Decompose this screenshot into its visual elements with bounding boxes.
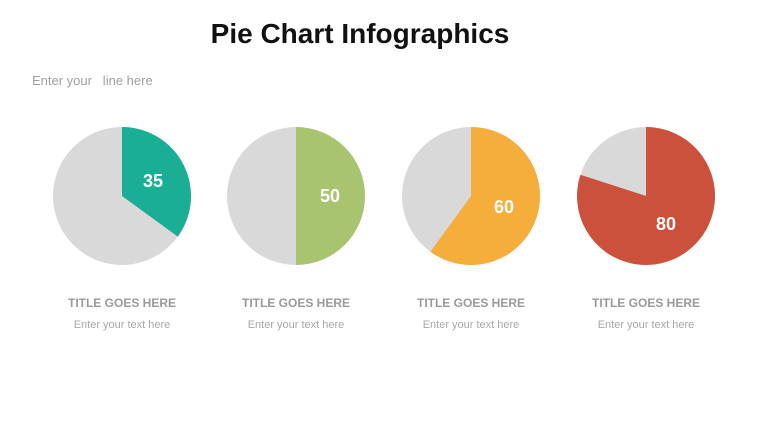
pie: 50: 50 <box>320 186 340 206</box>
label 2: Enter your text here <box>248 319 344 331</box>
label 2: TITLE GOES HERE <box>242 296 350 310</box>
label 1: TITLE GOES HERE <box>68 296 176 310</box>
label 4 <box>592 296 700 331</box>
label 1: Enter your text here <box>74 319 170 331</box>
label 4: Enter your text here <box>598 319 694 331</box>
pie: 60: 60 <box>494 197 514 217</box>
subtitle: Enter your line here <box>32 73 153 88</box>
pie: 80 <box>577 127 715 265</box>
label 2 <box>242 296 350 331</box>
pie: 80: 80 <box>656 214 676 234</box>
label 1 <box>68 296 176 331</box>
pie: 35 <box>53 127 191 265</box>
label 4: TITLE GOES HERE <box>592 296 700 310</box>
pie: 35: 35 <box>143 171 163 191</box>
title: Pie Chart Infographics <box>211 18 509 49</box>
pie: 60 <box>402 127 540 265</box>
label 3: TITLE GOES HERE <box>417 296 525 310</box>
pie: 50 <box>227 127 365 265</box>
label 3 <box>417 296 525 331</box>
label 3: Enter your text here <box>423 319 519 331</box>
